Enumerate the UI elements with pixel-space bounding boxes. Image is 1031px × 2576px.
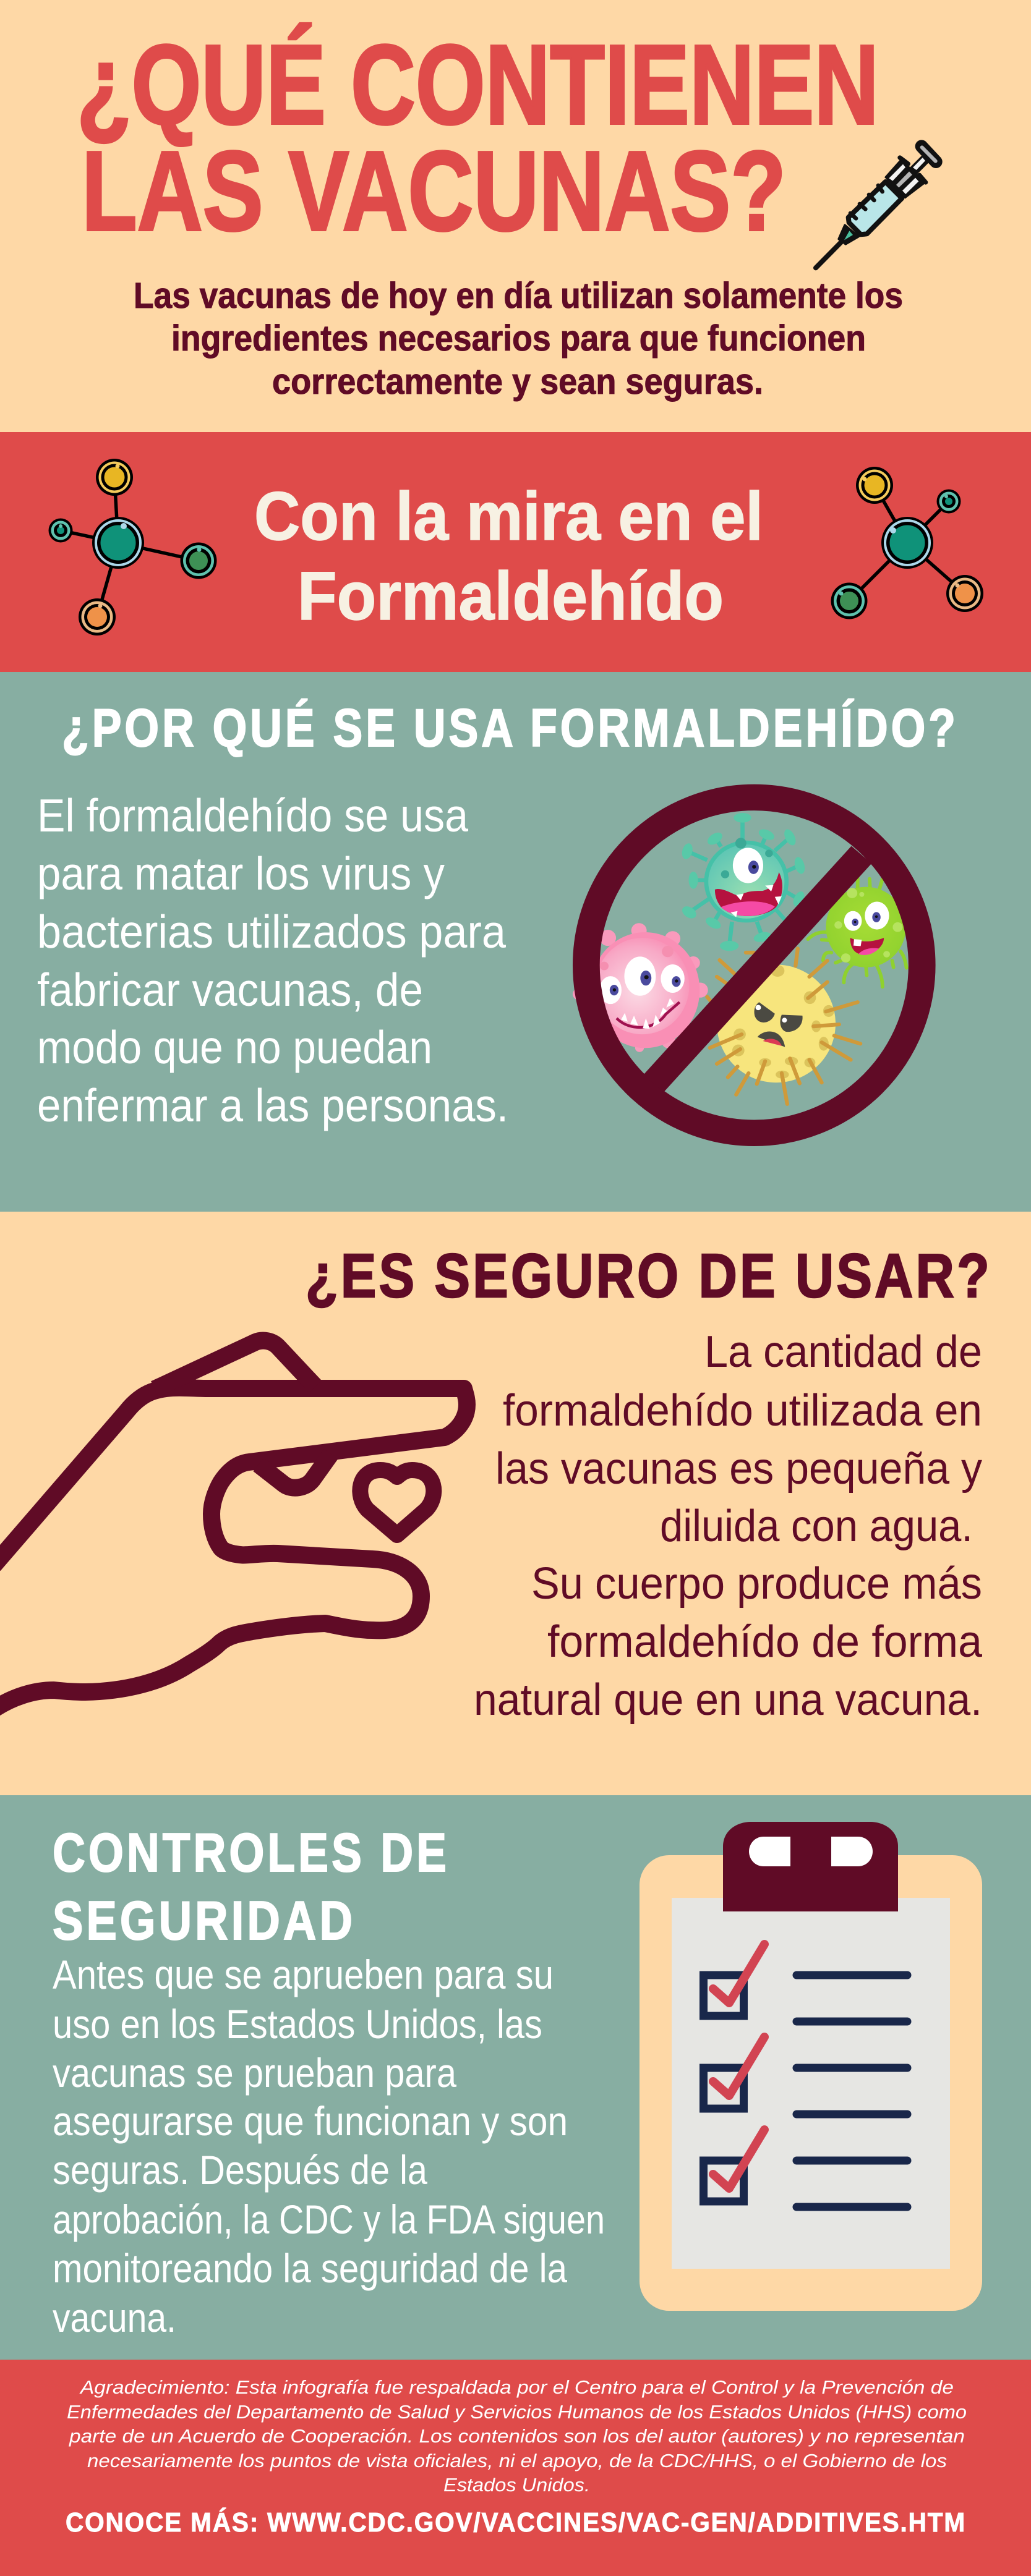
body text: uso en los Estados Unidos, las — [53, 2001, 542, 2047]
body text — [53, 1952, 605, 2340]
icon: viruses crossed out — [573, 797, 922, 1133]
section heading: SEGURIDAD — [53, 1890, 356, 1951]
acknowledgement text — [67, 2376, 967, 2496]
panel: is it safe to use — [0, 1212, 1031, 1796]
panel: safety controls — [0, 1795, 1031, 2360]
body text: enfermar a las personas. — [37, 1079, 508, 1131]
checklist item 3 — [704, 2130, 907, 2207]
icon: prohibition sign — [586, 797, 922, 1133]
subtitle text — [134, 276, 903, 402]
icon: hand holding heart — [0, 1341, 467, 1709]
body text: formaldehído de forma — [547, 1617, 983, 1667]
acknowledgement text: Estados Unidos. — [443, 2474, 590, 2496]
virus: pink — [573, 923, 708, 1052]
body text: modo que no puedan — [37, 1021, 432, 1073]
subtitle text: Las vacunas de hoy en día utilizan solamente los — [134, 276, 903, 316]
icon: clipboard checklist — [640, 1822, 982, 2311]
banner heading — [254, 478, 763, 634]
body text: formaldehído utilizada en — [503, 1386, 982, 1435]
body text: vacuna. — [53, 2295, 176, 2340]
body text: fabricar vacunas, de — [37, 964, 423, 1016]
icon: left molecule — [48, 459, 216, 635]
body text: natural que en una vacuna. — [474, 1675, 982, 1725]
virus: green — [808, 877, 907, 987]
body text: para matar los virus y — [37, 848, 445, 899]
virus: teal — [680, 813, 806, 951]
acknowledgement text: necesariamente los puntos de vista oficiales, ni el apoyo, de la CDC/HHS, o el Gobierno de los — [87, 2450, 947, 2472]
checklist item 2 — [704, 2037, 907, 2114]
banner heading: Con la mira en el — [254, 478, 763, 555]
icon: syringe — [816, 147, 936, 268]
body text: bacterias utilizados para — [37, 906, 506, 958]
body text: La cantidad de — [704, 1327, 982, 1377]
panel: why formaldehyde is used — [0, 672, 1031, 1212]
section heading — [53, 1822, 450, 1951]
acknowledgement text: Agradecimiento: Esta infografía fue respaldada por el Centro para el Control y la Prevención de — [79, 2376, 954, 2398]
icon: right molecule — [831, 467, 983, 619]
body text — [474, 1327, 983, 1725]
body text: asegurarse que funcionan y son — [53, 2098, 568, 2144]
learn more link text: CONOCE MÁS: WWW.CDC.GOV/VACCINES/VAC-GEN/ADDITIVES.HTM — [66, 2507, 966, 2538]
panel: footer — [0, 2360, 1031, 2576]
title: LAS VACUNAS? — [82, 127, 786, 254]
body text — [37, 789, 508, 1131]
body text: diluida con agua. — [660, 1502, 973, 1551]
acknowledgement text: parte de un Acuerdo de Cooperación. Los contenidos son los del autor (autores) y no representan — [69, 2425, 965, 2447]
body text: seguras. Después de la — [53, 2147, 427, 2193]
checklist item 1 — [704, 1944, 907, 2021]
virus: yellow — [707, 948, 860, 1104]
body text: El formaldehído se usa — [37, 789, 468, 841]
body text: las vacunas es pequeña y — [495, 1444, 982, 1494]
body text: aprobación, la CDC y la FDA siguen — [53, 2196, 605, 2242]
banner heading: Formaldehído — [297, 558, 724, 634]
body text: vacunas se prueban para — [53, 2050, 456, 2096]
body text: monitoreando la seguridad de la — [53, 2245, 567, 2291]
panel: intro header — [0, 0, 1031, 433]
subtitle text: correctamente y sean seguras. — [272, 362, 763, 402]
body text: Antes que se aprueben para su — [53, 1952, 554, 1997]
section heading: CONTROLES DE — [53, 1822, 450, 1883]
panel: formaldehyde banner — [0, 432, 1031, 673]
subtitle text: ingredientes necesarios para que funcionen — [171, 318, 866, 359]
title — [77, 21, 879, 254]
body text: Su cuerpo produce más — [531, 1559, 982, 1609]
acknowledgement text: Enfermedades del Departamento de Salud y Servicios Humanos de los Estados Unidos (HHS) como — [67, 2401, 967, 2423]
